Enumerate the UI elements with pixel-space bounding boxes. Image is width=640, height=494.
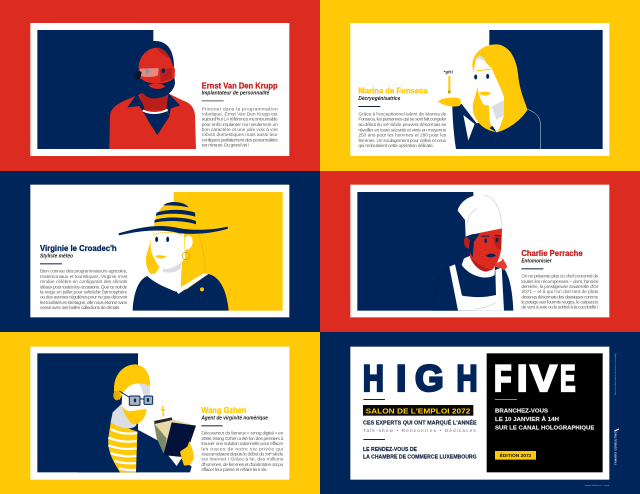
biography text: 2068, Wang Gzhen a été l'un des premiers à [201,436,284,442]
biography text: au début du xxᵉ siècle peuvent désormais se [358,122,447,128]
panel: High Five announcement [320,332,640,494]
biography text: le potage aux fourmis rouges, le carpaccio [521,300,599,306]
FIVE title [494,358,576,399]
website: www.tamaris.com [585,484,609,487]
logo: consultancy: TAMARIS CONSULTING [613,432,617,465]
logo: consultancy [613,428,619,465]
biography text [521,274,599,311]
illustration: woman in striped hat [118,202,229,311]
HIGH title [363,358,478,399]
biography text: On ne présente plus ce chef couronné de [521,274,599,280]
biography text: idéaux pour toutes les occasions. Que ce soit de [40,284,128,290]
FIVE title: I [517,358,527,399]
broadcast details [495,409,595,432]
white card [350,185,609,317]
biography text: rendue célèbre en configurant des climats [40,279,128,285]
biography text: effacer leur passé et refaire leur vie. [201,467,268,473]
biography text: Pionnier dans la programmation [202,106,278,112]
biography text: configurer parfaitement des personnalités [202,137,278,143]
HIGH title: I [396,358,406,399]
event formats: Talk-show • Rencontres • Dédicaces [363,428,476,433]
illustration: woman with test tube [438,44,541,149]
biography text: toutes les récompenses – dont, l'année [521,279,599,285]
biography text: réveiller en toute sécurité et vivre en moyenne [358,127,447,133]
biography text: de vers à soie ou le sorbet à la coccinelle ! [521,305,598,311]
panel: Virginie le Croadec'h [0,171,320,332]
biography text: d'hommes, de femmes et d'androïdes ont pu [201,462,284,468]
illustration: woman with test tube: *µH! [444,70,453,75]
biography text: femmes. Un soulagement pour celles et ceux [358,138,447,144]
biography text [201,431,284,473]
biography text: 2071 – et à qui l'on doit tant de plats [521,289,599,295]
biography text: sur internet ! Grâce à lui, des millions [201,457,284,463]
biography text [358,111,447,149]
illustration: man reading a tablet [76,364,196,472]
job title: Entomonisier [521,258,553,264]
FIVE title: F [494,358,511,399]
organiser: LE RENDEZ-VOUS DE [363,447,418,453]
biography text: robotique, Ernst Van Den Krupp est [202,112,278,118]
white card [30,347,289,480]
biography text: s'accumulaient depuis le début du xxiᵉ siècle [201,451,284,457]
biography text [202,106,278,149]
name: Marina de Fonseca [358,86,428,96]
white card [30,185,289,317]
biography text: Bien connue des programmateurs agricoles, [40,269,127,275]
edition badge: ÉDITION 2072 [500,453,532,458]
biography text: pour enfin implanter non seulement un [202,122,278,128]
yellow backdrop [174,192,283,311]
biography text: cesse avec ses belles collections de climats. [40,305,120,311]
navy backdrop [37,353,138,472]
subtitle: CES EXPERTS QUI ONT MARQUÉ L'ANNÉE [363,418,477,426]
job title: Agent de virginité numérique [200,415,268,421]
biography text: trouver une solution rationnelle pour effacer [201,441,284,447]
panel: Wang Gzhen [0,332,320,494]
biography text: Découvreur du fameux « smog digital » en [201,431,284,437]
panel: Marina de Fonseca [320,0,640,171]
name: Charlie Perrache [521,248,583,258]
vertical credit: Document fictif réalisé par Tamaris Consulting [614,353,617,395]
biography text: robots domestiques mais aussi leur [202,132,278,138]
biography text: 250 ans pour les hommes et 280 pour les [358,133,447,139]
edition badge [495,451,536,460]
navy backdrop [37,30,153,149]
white card [350,23,609,156]
organiser [363,447,477,461]
biography text: la neige en juillet pour rafraîchir l'atmosphère [40,289,128,295]
broadcast details: SUR LE CANAL HOLOGRAPHIQUE [495,426,595,432]
HIGH title: H [363,358,384,399]
FIVE title: V [530,358,557,399]
black block [487,353,603,472]
broadcast details: LE 10 JANVIER À 14H [495,416,559,423]
job title: Styliste météo [40,253,73,259]
biography text: Fonseca, les personnes qui se sont fait congeler [358,117,447,123]
event name label: SALON DE L'EMPLOI 2072 [366,406,470,415]
name: Ernst Van Den Krupp [202,81,278,91]
biography text: bon caractère et une jolie voix à vos [202,127,278,133]
biography text: Grâce à l'exceptionnel talent de Marina de [358,111,447,117]
job title: Implantateur de personnalité [202,91,270,97]
illustration: man with beard [109,41,196,149]
biography text: qui redoutaient cette opération délicate. [358,143,434,149]
HIGH title: H [456,358,478,399]
biography text: sur mesure. Du grand art ! [202,143,249,149]
panel: Ernst Van Den Krupp [0,0,320,171]
biography text: dernière, la prestigieuse Sauterelle d'Or [521,284,599,290]
FIVE title: E [560,358,575,399]
panel: Charlie Perrache [320,171,640,332]
illustration: chef [433,195,513,311]
broadcast details: BRANCHEZ-VOUS [495,409,548,415]
biography text: aujourd'hui LA référence incontournable [202,117,278,123]
biography text [40,269,128,311]
name: Virginie le Croadec'h [40,243,117,253]
job title: Décryogénisatrice [358,96,401,102]
biography text: matrimoniaux et touristiques, Virginie s'est [40,274,128,280]
biography text: devenus désormais des classiques comme [521,294,599,300]
white card [350,347,609,480]
name: Wang Gzhen [201,405,246,415]
biography text: les touristes en Bretagne, elle nous étonne sans [40,300,128,306]
navy backdrop [357,192,473,311]
navy backdrop [489,30,603,149]
white card [30,23,289,156]
biography text: les traces de notre vie privée qui [201,446,283,452]
organiser: LA CHAMBRE DE COMMERCE LUXEMBOURG [363,455,477,461]
HIGH title: G [415,358,444,399]
biography text: ou des averses régulières pour ne pas décevoir [40,295,128,301]
